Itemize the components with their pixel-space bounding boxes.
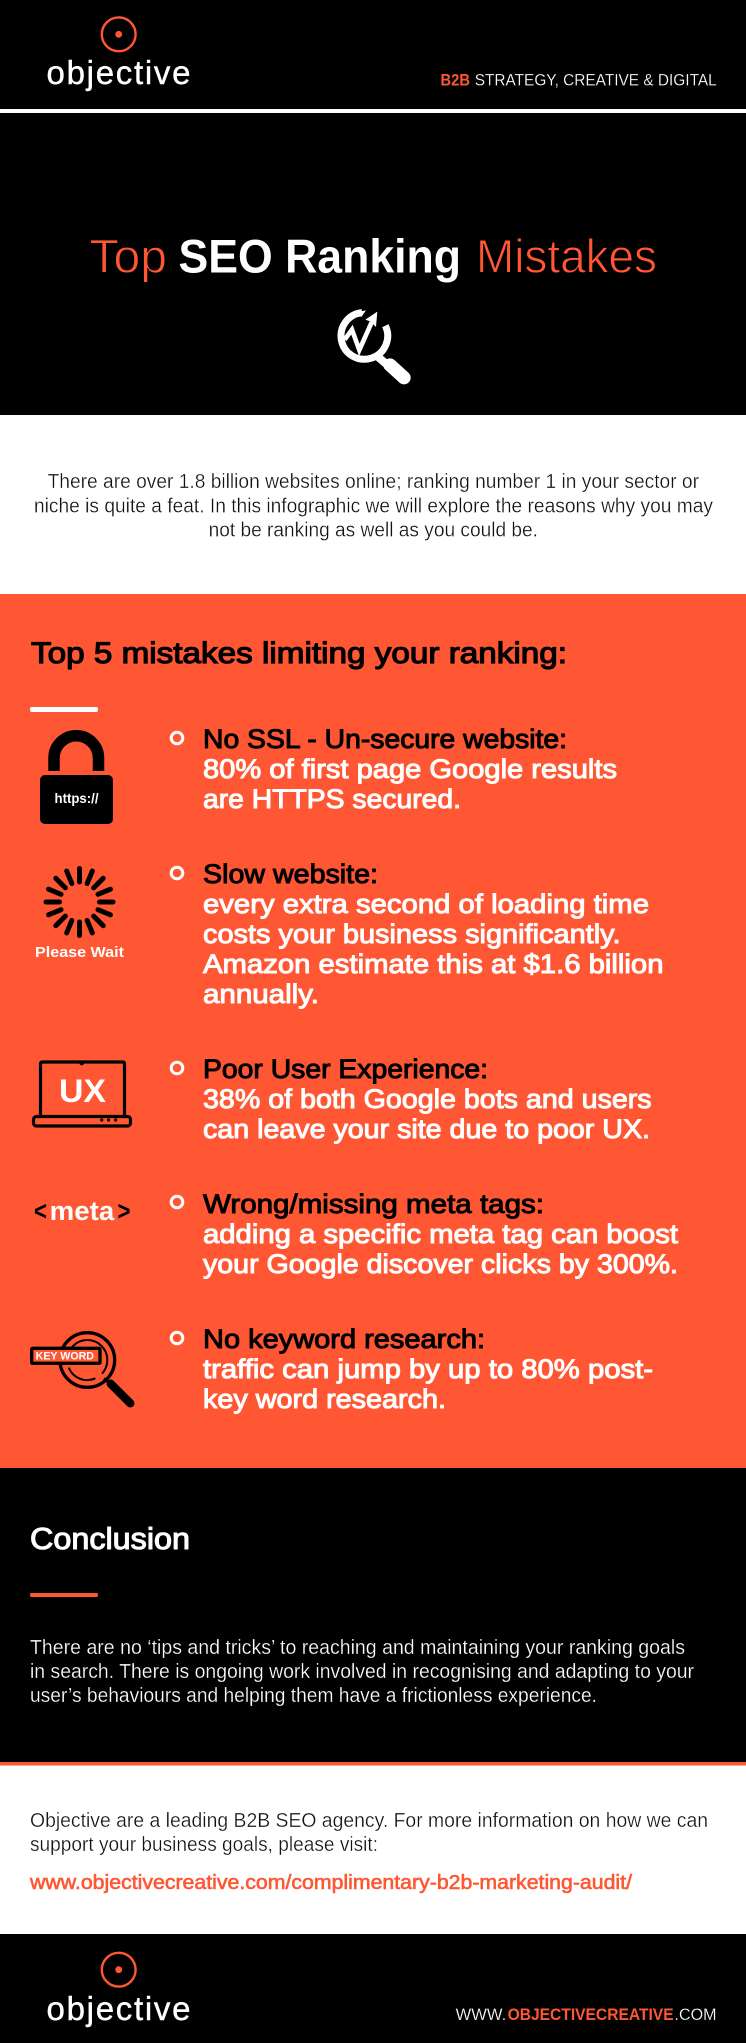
logo: objective footer: objective — [46, 1990, 190, 2027]
item: slow website: annually. — [203, 979, 319, 1009]
icon: meta tag — [34, 1196, 130, 1226]
website address: WWW. — [456, 2006, 506, 2024]
item: slow website: every extra second of loading time — [203, 889, 649, 919]
item: meta tags: adding a specific meta tag can boost — [203, 1219, 679, 1249]
logo: objective footer — [46, 1953, 190, 2027]
intro text: not be ranking as well as you could be. — [209, 520, 538, 542]
conclusion text: There are no ‘tips and tricks’ to reaching and maintaining your ranking goals — [30, 1637, 685, 1659]
heading: conclusion: Conclusion — [30, 1521, 190, 1556]
website address — [456, 2006, 716, 2024]
icon: laptop UX — [34, 1061, 130, 1126]
icon: padlock https: https:// — [54, 790, 99, 806]
panel: hero — [0, 113, 746, 415]
icon: magnifier with rising arrow — [341, 310, 404, 378]
logo: objective — [46, 17, 190, 91]
item: keyword research: key word research. — [203, 1384, 446, 1414]
title: SEO Ranking — [178, 230, 461, 283]
divider: white header line — [0, 109, 746, 113]
icon: loading spinner: Please Wait — [35, 944, 124, 961]
divider: orange line — [0, 1762, 746, 1766]
item: slow website: Slow website: — [203, 859, 378, 889]
item: poor user experience — [171, 1054, 652, 1144]
item: slow website: costs your business significantly. — [203, 919, 620, 949]
icon: meta tag: > — [118, 1196, 130, 1226]
item: no SSL: No SSL - Un-secure website: — [203, 724, 567, 754]
cta link: www.objectivecreative.com/complimentary-b2b-marketing-audit/ — [29, 1872, 632, 1894]
tagline: STRATEGY, CREATIVE & DIGITAL — [475, 72, 717, 90]
panel: header — [0, 0, 746, 109]
conclusion text: in search. There is ongoing work involved in recognising and adapting to your — [30, 1661, 694, 1683]
item: keyword research — [171, 1324, 653, 1414]
icon: meta tag: meta — [50, 1196, 115, 1226]
item: slow website — [171, 859, 663, 1009]
panel: conclusion — [0, 1468, 746, 1762]
intro text: There are over 1.8 billion websites online; ranking number 1 in your sector or — [48, 471, 699, 493]
item: keyword research: traffic can jump by up to 80% post- — [203, 1354, 653, 1384]
cta text: Objective are a leading B2B SEO agency. For more information on how we can — [30, 1810, 708, 1832]
item: meta tags: your Google discover clicks by 300%. — [203, 1249, 678, 1279]
icon: keyword magnifier: KEY WORD — [36, 1351, 94, 1363]
title: Mistakes — [476, 230, 657, 283]
item: poor user experience: can leave your site due to poor UX. — [203, 1114, 650, 1144]
item: meta tags — [171, 1189, 679, 1279]
item: poor user experience: 38% of both Google bots and users — [203, 1084, 652, 1114]
cta text: support your business goals, please visit: — [30, 1834, 378, 1856]
rule: orange — [30, 1593, 98, 1597]
icon: keyword magnifier — [32, 1333, 130, 1403]
title: Top — [90, 230, 167, 283]
heading: top 5 mistakes: Top 5 mistakes limiting your ranking: — [31, 637, 567, 670]
logo: objective: objective — [46, 54, 190, 91]
icon: laptop UX: UX — [59, 1073, 107, 1109]
item: no SSL: 80% of first page Google results — [203, 754, 617, 784]
item: poor user experience: Poor User Experience: — [203, 1054, 488, 1084]
item: keyword research: No keyword research: — [203, 1324, 485, 1354]
tagline: B2B — [440, 72, 470, 90]
item: no SSL — [171, 724, 617, 814]
item: slow website: Amazon estimate this at $1.6 billion — [203, 949, 664, 979]
website address: .COM — [674, 2006, 716, 2024]
panel: intro — [0, 415, 746, 594]
icon: meta tag: < — [34, 1196, 47, 1226]
panel: footer — [0, 1934, 746, 2043]
panel: mistakes — [0, 594, 746, 1468]
conclusion text — [30, 1637, 694, 1707]
website address: OBJECTIVECREATIVE — [508, 2006, 674, 2024]
conclusion text: user’s behaviours and helping them have a frictionless experience. — [30, 1685, 597, 1707]
intro text: niche is quite a feat. In this infographic we will explore the reasons why you may — [34, 496, 713, 518]
item: meta tags: Wrong/missing meta tags: — [203, 1189, 544, 1219]
cta text — [30, 1810, 708, 1856]
panel: call to action — [0, 1766, 746, 1934]
item: no SSL: are HTTPS secured. — [203, 784, 461, 814]
icon: padlock https — [40, 736, 113, 824]
intro text — [34, 471, 713, 542]
icon: loading spinner — [35, 868, 124, 961]
rule: white — [30, 707, 98, 712]
title — [90, 230, 657, 283]
